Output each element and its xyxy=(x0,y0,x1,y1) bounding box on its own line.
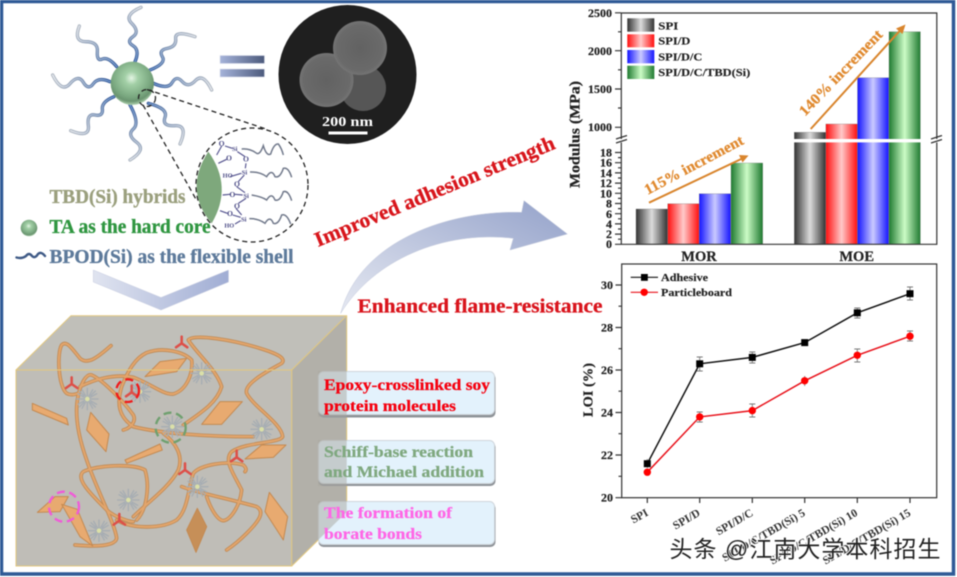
x axis labels: SPI xyxy=(629,507,651,526)
y axis title: Modulus (MPa) xyxy=(568,81,584,188)
hybrid particles xyxy=(77,363,272,541)
label text: Schiff-base: Schiff-base reaction xyxy=(324,444,473,461)
y axis tick labels: 4 xyxy=(606,217,612,231)
y axis tick labels: 2500 xyxy=(588,6,612,20)
protein ribbons xyxy=(59,337,283,550)
y axis tick labels: 6 xyxy=(606,207,612,221)
x category labels: MOE xyxy=(839,249,874,265)
legend xyxy=(631,273,732,299)
soy protein flakes xyxy=(32,358,288,552)
label text: epoxy-crosslinked xyxy=(324,377,490,415)
dashed bond markers xyxy=(49,379,186,522)
cube overlay on boxes xyxy=(318,370,348,540)
y axis tick labels: 2000 xyxy=(588,44,612,58)
error bars xyxy=(647,287,913,475)
y axis tick labels: 20 xyxy=(601,490,613,504)
SEM micrograph xyxy=(278,5,416,144)
molecular structure of the shell: HO xyxy=(224,223,234,230)
x category labels xyxy=(681,249,874,265)
arrow: MOR increment: 115% increment xyxy=(642,133,747,199)
MOR bars xyxy=(636,163,763,244)
label text: Schiff-base xyxy=(324,444,484,481)
label text: Schiff-base: and Michael addition xyxy=(324,464,484,481)
molecular structure of the shell: O xyxy=(227,209,233,218)
molecular structure of the shell: O xyxy=(243,155,249,164)
x axis labels: SPI/D/C/TBD(Si) 10 xyxy=(768,507,860,567)
y axis tick labels: 26 xyxy=(601,363,613,377)
legend: BPOD(Si) as the flexible shell: BPOD(Si) as the flexible shell xyxy=(50,246,294,268)
legend: SPI/D xyxy=(658,36,690,48)
series: Adhesive xyxy=(644,290,914,467)
y axis tick labels: 24 xyxy=(601,406,613,420)
label text: borate: borate bonds xyxy=(324,526,422,543)
epoxy crosslinkers xyxy=(66,337,242,525)
icon: equals sign xyxy=(220,56,264,77)
x axis labels: SPI/D/C xyxy=(714,507,756,538)
legend: SPI xyxy=(658,20,678,32)
molecular structure of the shell: O xyxy=(219,139,225,148)
x axis labels: SPI/D xyxy=(671,507,702,532)
molecular structure of the shell: O xyxy=(234,201,240,210)
molecular structure of the shell: O xyxy=(234,179,240,188)
label box: borate xyxy=(318,502,496,547)
y axis tick labels: 18 xyxy=(600,146,612,160)
y axis tick labels: 0 xyxy=(606,237,612,251)
icon: TBD(Si) hybrid particle xyxy=(53,7,212,160)
molecular structure of the shell: Si xyxy=(242,170,247,177)
arrow: MOE increment xyxy=(796,24,906,129)
zoom callout: dashed lines and circle xyxy=(138,90,308,242)
molecular structure of the shell: HO xyxy=(223,173,233,180)
arrow: chevron pointing down xyxy=(93,270,228,310)
y axis tick labels xyxy=(588,6,612,251)
y axis tick labels: 8 xyxy=(606,196,612,210)
SEM micrograph: 200 nm xyxy=(322,115,373,130)
y axis tick labels xyxy=(601,278,613,504)
legend: Adhesive xyxy=(661,273,708,284)
cube: adhesive network xyxy=(16,316,347,566)
x axis labels: SPI/D/C/TBD(Si) 15 xyxy=(821,507,913,567)
x axis labels xyxy=(629,507,913,567)
line chart: LOI xyxy=(582,264,937,567)
label text: epoxy-crosslinked: protein molecules xyxy=(324,398,456,415)
x axis labels: SPI/D/C/TBD(Si) 5 xyxy=(720,507,808,564)
arrow: big curved arrow xyxy=(341,201,567,313)
legend: TA as the hard core: TA as the hard core xyxy=(50,216,211,238)
y axis tick labels: 1000 xyxy=(588,120,612,134)
series: Particleboard xyxy=(644,332,914,476)
y axis tick labels: 12 xyxy=(600,176,612,190)
molecular structure of the shell: O xyxy=(229,190,235,199)
label box: Schiff-base xyxy=(318,440,496,486)
legend text: TBD(Si) hybrids: TBD(Si) hybrids xyxy=(50,186,186,208)
MOE bars xyxy=(794,32,920,244)
y axis tick labels: 22 xyxy=(601,448,613,462)
y axis tick labels: 10 xyxy=(600,186,612,200)
arrow: MOE increment: 140% increment xyxy=(796,27,886,119)
label box: epoxy-crosslinked xyxy=(318,372,496,418)
y axis tick labels: 16 xyxy=(600,156,612,170)
watermark: 头条 @江南大学本科招生 xyxy=(670,536,940,562)
heading: enhanced flame-resistance: Enhanced flame-resistance xyxy=(358,296,603,318)
bar chart: modulus xyxy=(568,6,942,265)
legend xyxy=(627,18,751,79)
molecular structure of the shell: Si xyxy=(241,216,247,223)
heading: improved adhesion strength: Improved adhesion strength xyxy=(311,131,559,252)
legend: SPI/D/C xyxy=(658,52,702,64)
y axis tick labels: 30 xyxy=(601,278,613,292)
molecular structure of the shell xyxy=(197,139,292,230)
y axis tick labels: 28 xyxy=(601,320,613,334)
x category labels: MOR xyxy=(681,249,717,265)
y axis tick labels: 1500 xyxy=(588,82,612,96)
molecular structure of the shell: Si xyxy=(232,146,238,153)
label text: borate: The formation of xyxy=(324,505,453,522)
y axis title: LOI (%) xyxy=(582,363,596,417)
label text: epoxy-crosslinked: Epoxy-crosslinked soy xyxy=(324,377,490,394)
label text: borate xyxy=(324,505,453,543)
legend: SPI/D/C/TBD(Si) xyxy=(658,67,751,79)
legend: Particleboard xyxy=(661,288,732,299)
y axis tick labels: 14 xyxy=(600,166,612,180)
molecular structure of the shell: Si xyxy=(243,193,249,200)
y axis tick labels: 2 xyxy=(606,227,612,241)
molecular structure of the shell: O xyxy=(226,153,232,162)
